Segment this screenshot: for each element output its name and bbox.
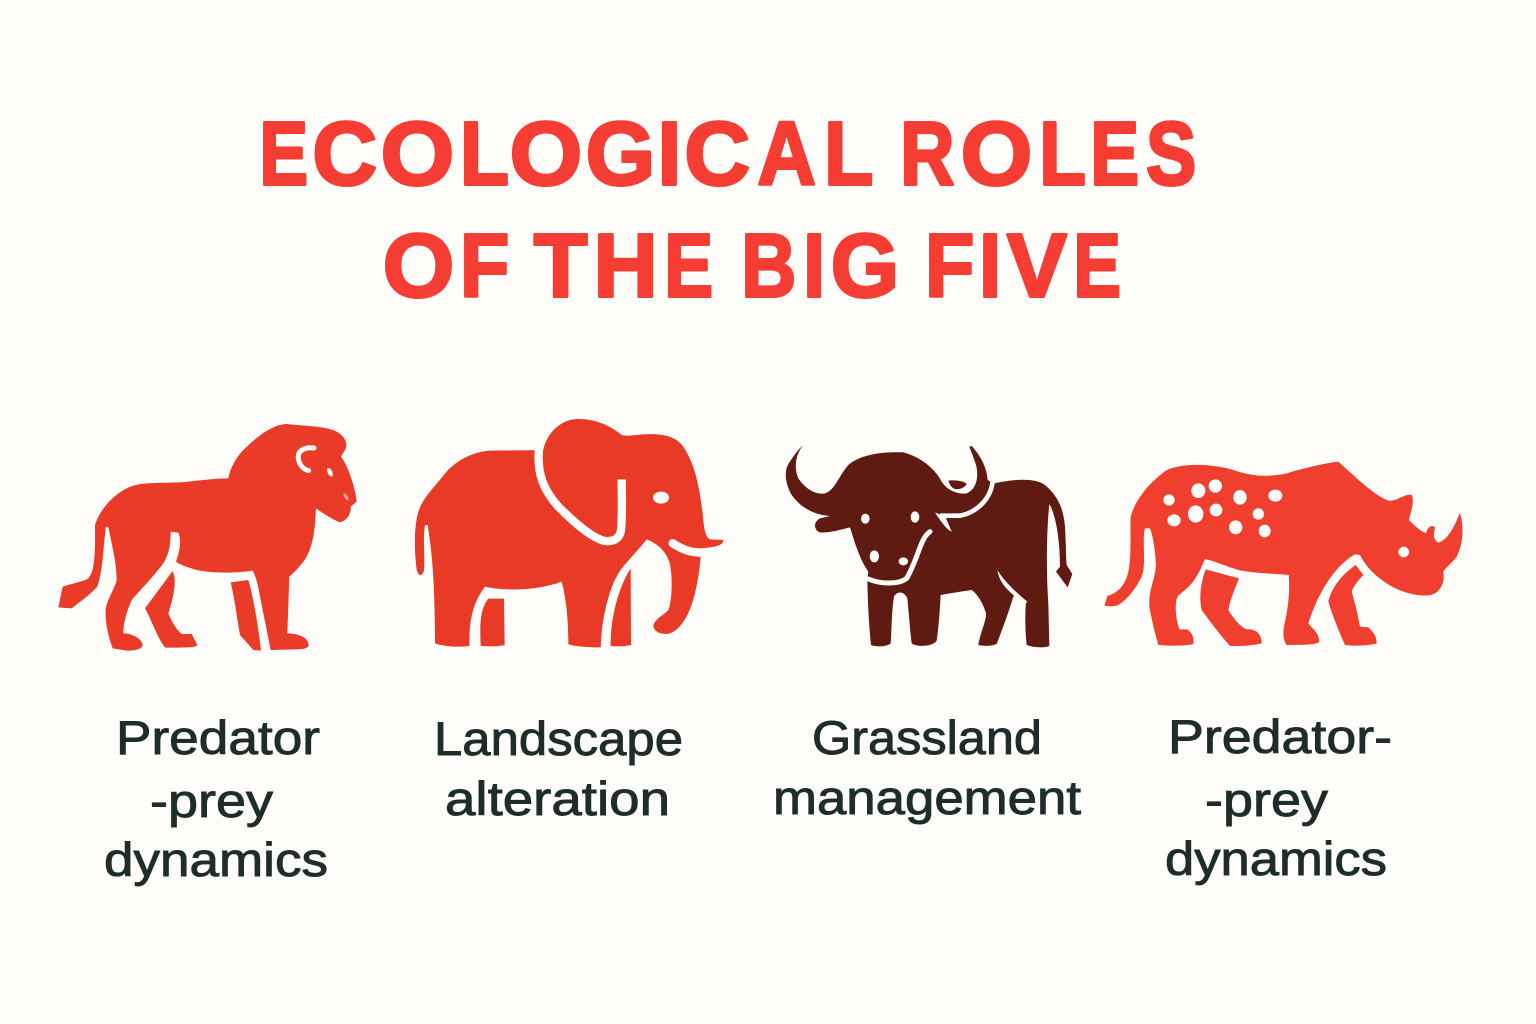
label: lion [104, 711, 328, 886]
label: rhino [1165, 710, 1392, 885]
title: O [510, 104, 582, 204]
label: rhino: -prey [1205, 773, 1329, 826]
title: O [383, 216, 454, 316]
label: elephant: alteration [445, 772, 670, 825]
label: lion: dynamics [104, 833, 328, 886]
label: lion: Predator [116, 711, 320, 764]
title: C [684, 104, 750, 204]
label: buffalo: management [773, 771, 1081, 824]
title: L [460, 104, 509, 204]
label: lion: -prey [150, 774, 274, 827]
title: H [594, 216, 658, 316]
title: I [979, 216, 1001, 316]
title: C [312, 104, 377, 204]
title: S [1146, 104, 1196, 204]
title: E [259, 104, 308, 204]
icon: elephant [415, 419, 723, 647]
icon: rhino [1104, 462, 1462, 646]
title: V [1007, 216, 1067, 316]
title: I [803, 216, 825, 316]
title: F [925, 216, 974, 316]
title: R [900, 104, 954, 204]
label: buffalo [773, 711, 1081, 824]
title: G [831, 216, 899, 316]
label: elephant [434, 712, 683, 825]
title: O [961, 104, 1032, 204]
title: L [1039, 104, 1086, 204]
title: I [658, 104, 681, 204]
title [259, 104, 1196, 316]
icon: lion [58, 424, 357, 651]
label: buffalo: Grassland [812, 711, 1042, 764]
title: B [741, 216, 796, 316]
title: T [534, 216, 587, 316]
title: E [1090, 104, 1139, 204]
label: rhino: dynamics [1165, 832, 1387, 885]
title: A [757, 104, 816, 204]
title: E [664, 216, 713, 316]
title: E [1073, 216, 1121, 316]
title: G [586, 104, 655, 204]
label: rhino: Predator- [1168, 710, 1392, 763]
icon: buffalo [786, 445, 1072, 647]
title: L [824, 104, 872, 204]
title: F [460, 216, 509, 316]
label: elephant: Landscape [434, 712, 683, 765]
title: O [381, 104, 454, 204]
